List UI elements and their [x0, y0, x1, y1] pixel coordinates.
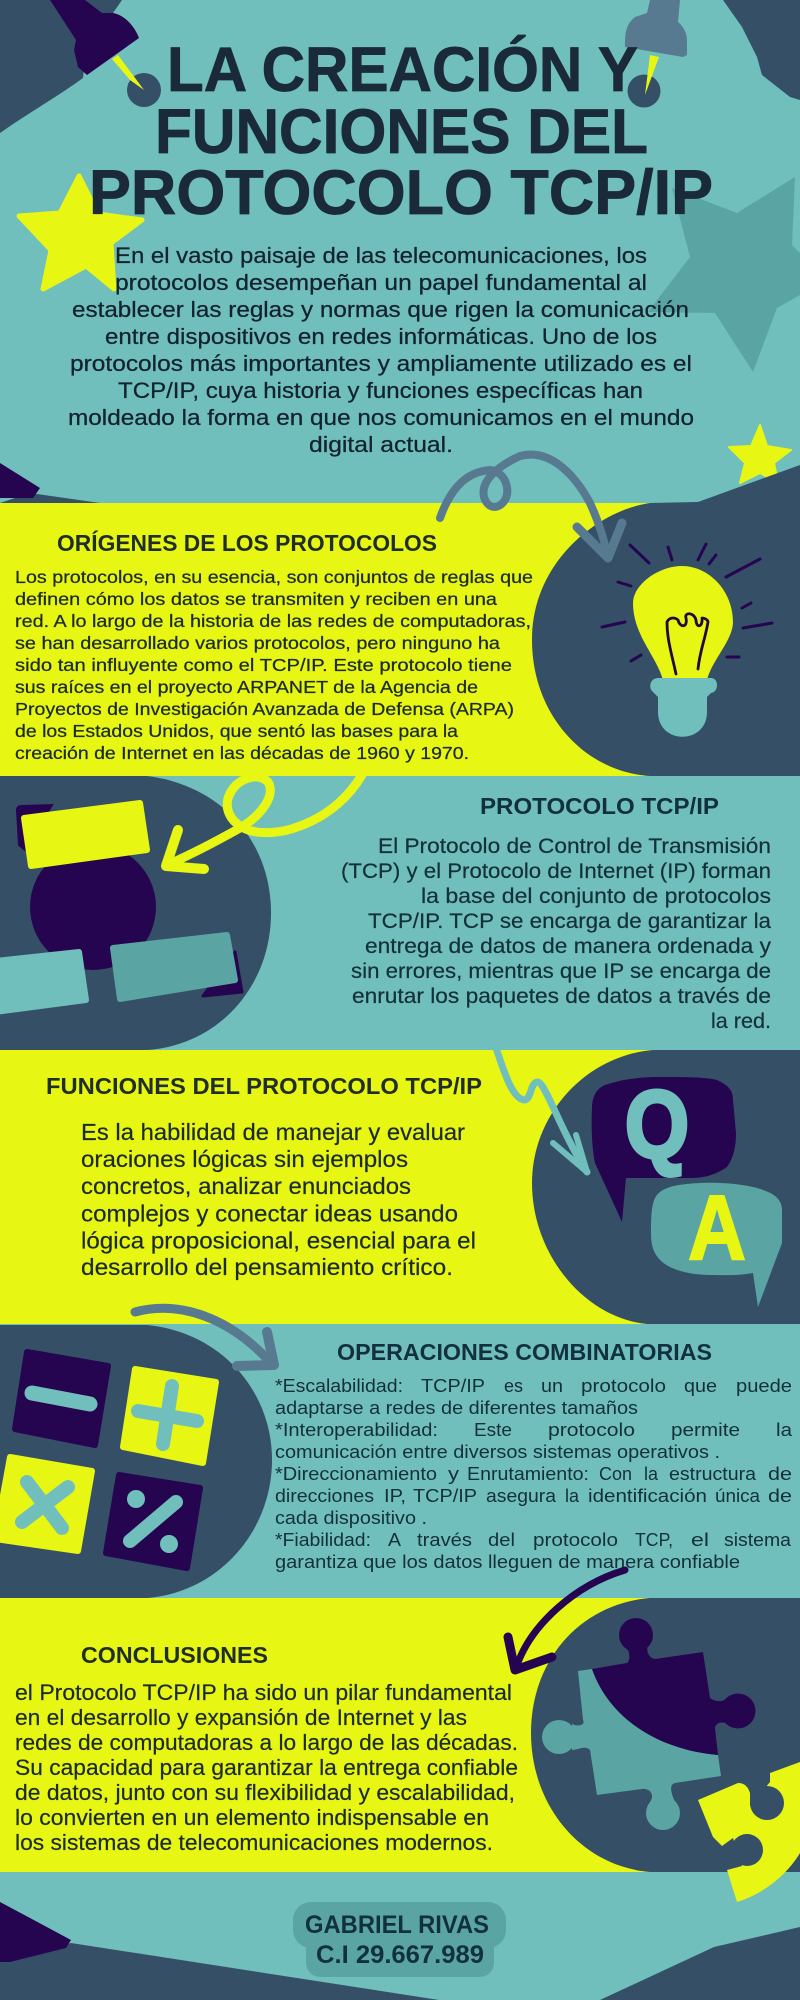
text: operations body: de	[768, 1464, 792, 1484]
text: conclusions body: redes de computadoras a lo largo de las décadas.	[15, 1730, 518, 1755]
text: TCP/IP body	[341, 835, 772, 1033]
text: operations body: sistema	[724, 1530, 792, 1550]
big teal star	[648, 177, 800, 372]
author card	[293, 1902, 506, 1977]
heading: operations: OPERACIONES COMBINATORIAS	[337, 1339, 712, 1365]
text: conclusions body: en el desarrollo y expansión de Internet y las	[15, 1705, 467, 1730]
text: operations body: través	[417, 1530, 472, 1550]
text: operations body: A	[388, 1530, 401, 1550]
text: TCP/IP body: la red.	[711, 1010, 771, 1033]
bottom-left corner shapes of header	[0, 463, 100, 503]
icon: Q and A speech bubbles: A	[688, 1177, 746, 1279]
text: operations body: adaptarse a redes de diferentes tamaños	[275, 1398, 638, 1418]
text: operations body: que	[684, 1376, 717, 1396]
text: TCP/IP body: (TCP) y el Protocolo de Internet (IP) forman	[341, 860, 771, 883]
text: operations body: *Escalabilidad:	[275, 1376, 403, 1396]
text: origins body: red. A lo largo de la historia de las redes de computadoras,	[15, 611, 531, 631]
text: operations body: la	[565, 1486, 580, 1506]
text: conclusions body: de datos, junto con su flexibilidad y escalabilidad,	[15, 1780, 515, 1805]
title: LA CREACIÓN Y	[167, 35, 638, 105]
text: origins body: sus raíces en el proyecto ARPANET de la Agencia de	[15, 677, 478, 697]
heading: conclusions: CONCLUSIONES	[81, 1642, 268, 1668]
text: origins body: Los protocolos, en su esencia, son conjuntos de reglas que	[15, 567, 533, 587]
text: conclusions body	[15, 1680, 518, 1855]
title	[89, 35, 713, 228]
text: operations body: TCP,	[635, 1530, 673, 1550]
text: operations body: de	[768, 1486, 792, 1506]
text: operations body: *Direccionamiento	[275, 1464, 437, 1484]
panel: origins blob	[532, 465, 800, 776]
text: operations body: identificación	[588, 1486, 707, 1506]
text: operations body: TCP/IP	[421, 1376, 485, 1396]
text: operations body: direcciones	[275, 1486, 374, 1506]
text: origins body	[15, 567, 533, 763]
text: functions body: desarrollo del pensamiento crítico.	[81, 1254, 453, 1280]
text: operations body: IP,	[384, 1486, 406, 1506]
text: functions body: complejos y conectar ideas usando	[81, 1200, 458, 1226]
text: operations body: Enrutamiento:	[467, 1464, 589, 1484]
text: operations body: permite	[671, 1420, 740, 1440]
bottom right shape	[600, 1927, 800, 2000]
intro text: En el vasto paisaje de las telecomunicaciones, los	[115, 243, 647, 268]
text: conclusions body: el Protocolo TCP/IP ha sido un pilar fundamental	[15, 1680, 512, 1705]
arrow: dark purple curved	[508, 1570, 625, 1670]
text: operations body: un	[541, 1376, 563, 1396]
text: TCP/IP body: entrega de datos de manera ordenada y	[365, 935, 772, 958]
pushpin right	[625, 0, 687, 108]
text: functions body: concretos, analizar enunciados	[81, 1173, 411, 1199]
yellow star right	[729, 425, 791, 483]
icon: calculator keys	[0, 1352, 216, 1568]
text: TCP/IP body: TCP/IP. TCP se encarga de garantizar la	[368, 910, 771, 933]
top left blob	[0, 0, 122, 133]
text: origins body: se han desarrollado varios protocolos, pero ninguno ha	[15, 633, 500, 653]
intro text: entre dispositivos en redes informáticas. Uno de los	[105, 324, 657, 349]
text: origins body: sido tan influyente como el TCP/IP. Este protocolo tiene	[15, 655, 512, 675]
text: operations body: cada dispositivo .	[275, 1508, 427, 1528]
text: TCP/IP body: El Protocolo de Control de Transmisión	[378, 835, 771, 858]
intro text	[68, 243, 694, 457]
text: operations body: la	[644, 1464, 659, 1484]
text: operations body: única	[715, 1486, 761, 1506]
text: origins body: Proyectos de Investigación Avanzada de Defensa (ARPA)	[15, 699, 514, 719]
text: operations body: estructura	[669, 1464, 757, 1484]
text: TCP/IP body: la base del conjunto de protocolos	[421, 885, 771, 908]
heading: origins: ORÍGENES DE LOS PROTOCOLOS	[57, 529, 437, 556]
title: FUNCIONES DEL	[155, 97, 648, 167]
text: functions body	[81, 1119, 476, 1280]
text: conclusions body: los sistemas de telecomunicaciones modernos.	[15, 1830, 493, 1855]
text: conclusions body: Su capacidad para garantizar la entrega confiable	[15, 1755, 518, 1780]
text: origins body: de los Estados Unidos, que sentó las bases para la	[15, 721, 458, 741]
text: origins body: creación de Internet en las décadas de 1960 y 1970.	[15, 743, 469, 763]
top right blob	[723, 0, 800, 100]
yellow star left	[19, 176, 142, 289]
text: TCP/IP body: sin errores, mientras que IP se encarga de	[351, 960, 771, 983]
text: operations body: protocolo	[533, 1530, 618, 1550]
intro text: moldeado la forma en que nos comunicamos en el mundo	[68, 405, 694, 430]
panel: TCP/IP blob	[0, 776, 271, 1050]
text: operations body: *Fiabilidad:	[275, 1530, 371, 1550]
text: operations body	[275, 1376, 793, 1572]
text: operations body: puede	[736, 1376, 792, 1396]
text: operations body: garantiza que los datos lleguen de manera confiable	[275, 1552, 740, 1572]
text: functions body: oraciones lógicas sin ejemplos	[81, 1146, 408, 1172]
author card: GABRIEL RIVAS	[305, 1911, 489, 1939]
text: origins body: definen cómo los datos se transmiten y reciben en una	[15, 589, 497, 609]
arrow: curly yellow	[166, 775, 362, 869]
intro text: protocolos más importantes y ampliamente utilizado es el	[70, 351, 692, 376]
panel: conclusions band	[0, 1598, 800, 1872]
intro text: TCP/IP, cuya historia y funciones específicas han	[118, 378, 643, 403]
arrow: curved blue	[135, 1308, 274, 1366]
text: operations body: protocolo	[581, 1376, 666, 1396]
text: conclusions body: lo convierten en un elemento indispensable en	[15, 1805, 489, 1830]
panel: conclusions blob	[531, 1598, 800, 1872]
author card: C.I 29.667.989	[316, 1941, 484, 1969]
panel: functions band	[0, 1050, 800, 1324]
text: operations body: es	[504, 1376, 523, 1396]
text: operations body: comunicación entre diversos sistemas operativos .	[275, 1442, 720, 1462]
panel: operations blob	[0, 1325, 272, 1598]
text: operations body: el	[691, 1530, 709, 1550]
title: PROTOCOLO TCP/IP	[89, 158, 713, 228]
text: operations body: Este	[474, 1420, 512, 1440]
pushpin left	[50, 0, 161, 107]
text: operations body: TCP/IP	[413, 1486, 477, 1506]
text: functions body: Es la habilidad de manejar y evaluar	[81, 1119, 465, 1145]
text: operations body: del	[488, 1530, 515, 1550]
arrow: curly blue	[440, 455, 622, 558]
text: operations body: protocolo	[548, 1420, 635, 1440]
icon: puzzle pieces	[542, 1618, 800, 1902]
text: operations body: la	[776, 1420, 793, 1440]
heading: TCP/IP: PROTOCOLO TCP/IP	[480, 793, 719, 819]
panel: functions blob	[532, 1050, 800, 1324]
icon: shapes diagram	[0, 803, 242, 1012]
intro text: digital actual.	[309, 432, 453, 457]
icon: Q and A speech bubbles	[592, 1071, 782, 1307]
text: TCP/IP body: enrutar los paquetes de datos a través de	[352, 985, 771, 1008]
heading: functions: FUNCIONES DEL PROTOCOLO TCP/IP	[46, 1073, 482, 1099]
bottom left shapes	[0, 1902, 439, 2000]
text: operations body: Con	[599, 1464, 632, 1484]
text: operations body: asegura	[486, 1486, 557, 1506]
intro text: establecer las reglas y normas que rigen la comunicación	[72, 297, 689, 322]
text: operations body: y	[448, 1464, 459, 1484]
intro text: protocolos desempeñan un papel fundamental al	[115, 270, 647, 295]
icon: light bulb	[602, 544, 772, 737]
panel: origins band	[0, 503, 800, 776]
text: functions body: lógica proposicional, esencial para el	[81, 1228, 476, 1254]
text: operations body: *Interoperabilidad:	[275, 1420, 438, 1440]
icon: Q and A speech bubbles: Q	[625, 1071, 689, 1178]
arrow: teal zigzag	[496, 1048, 587, 1172]
